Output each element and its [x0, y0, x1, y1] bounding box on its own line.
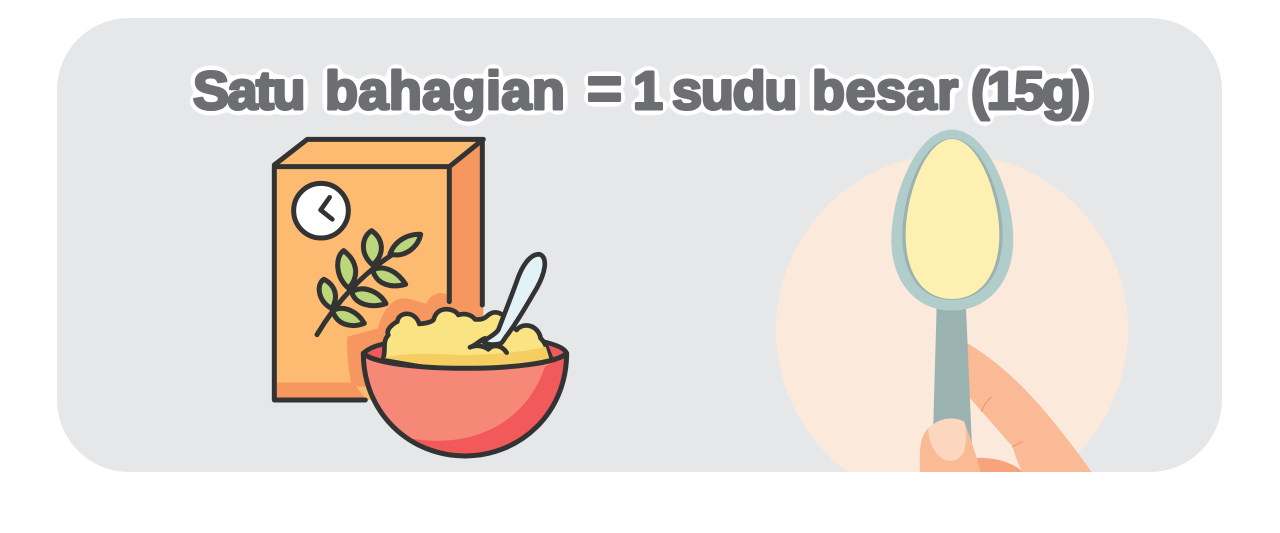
thumb	[920, 418, 1023, 472]
spoon handle	[933, 307, 972, 447]
illustration: hand holding spoon	[776, 130, 1128, 506]
title: bahagian	[325, 61, 565, 121]
title: besar	[812, 61, 959, 121]
spoon bowl	[891, 130, 1013, 311]
bowl body	[363, 353, 567, 456]
peach circle	[776, 158, 1128, 472]
porridge	[383, 309, 552, 373]
panel: grey rounded background	[57, 18, 1222, 472]
powder	[906, 139, 999, 299]
cereal box	[274, 139, 483, 400]
finger behind spoon	[967, 343, 1092, 472]
title: =	[587, 55, 622, 122]
clock on box	[294, 183, 348, 238]
title: sudu	[672, 61, 796, 121]
spoon inner shade	[902, 138, 1003, 300]
title: Satu	[193, 61, 304, 121]
title: (15g)	[971, 61, 1088, 121]
spoon in porridge	[470, 254, 545, 353]
wheat sprig on box	[317, 231, 421, 335]
icon: cereal box and porridge bowl	[274, 139, 567, 456]
title: 1	[633, 61, 663, 121]
bowl rim back	[363, 342, 567, 368]
